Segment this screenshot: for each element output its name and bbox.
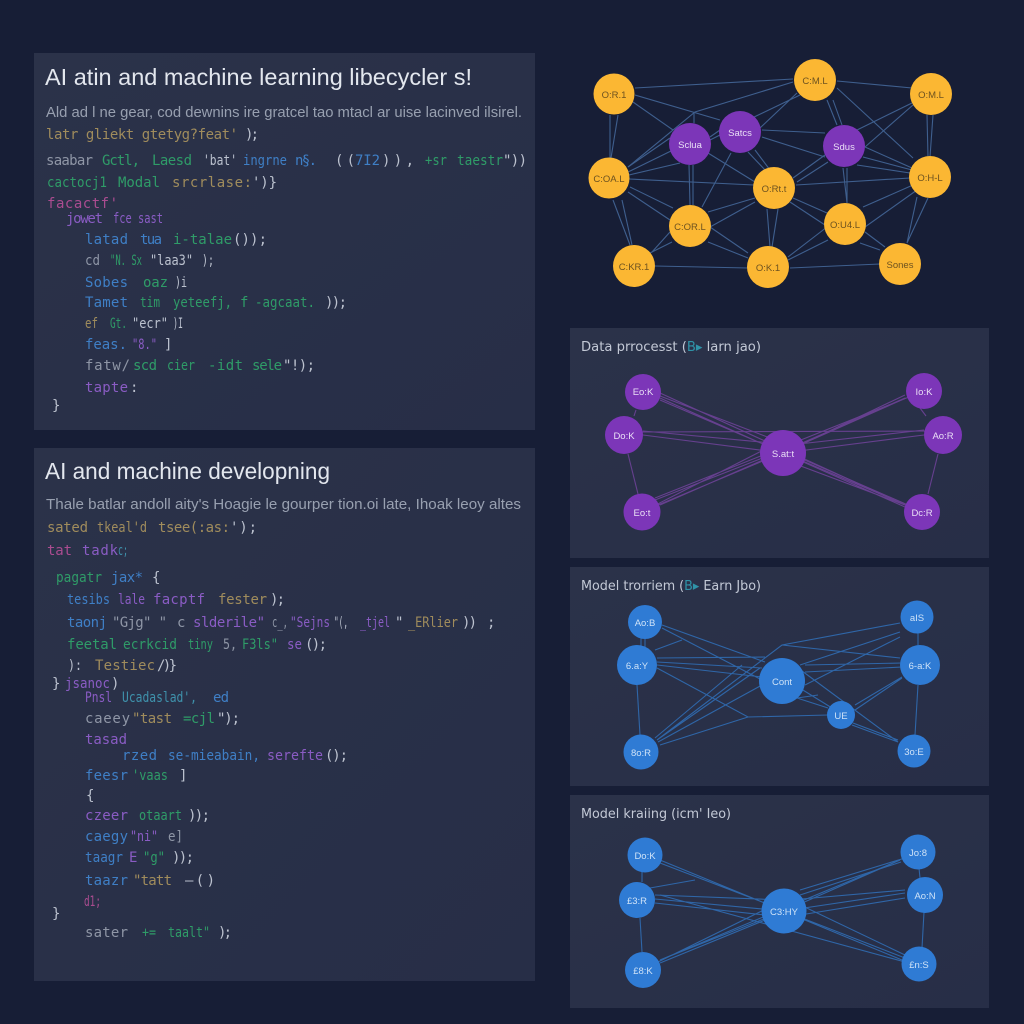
- code block: {: [86, 788, 94, 804]
- purple nodes: Satcs: [728, 128, 752, 139]
- code block: 5,: [223, 637, 237, 653]
- code block: f: [240, 295, 248, 311]
- code block: ):: [68, 658, 82, 674]
- code block: );: [218, 925, 232, 941]
- code block: Ucadaslad',: [122, 690, 197, 706]
- code block: taalt": [168, 925, 210, 941]
- panel: model tracking: [570, 795, 989, 1008]
- code block: );: [202, 253, 214, 269]
- code block: pagatr: [56, 570, 102, 586]
- blue nodes: £8:K: [633, 966, 653, 977]
- code block: c;: [118, 543, 128, 559]
- purple network edges: [628, 391, 943, 512]
- code block: ")): [503, 153, 527, 169]
- code block: ((: [335, 153, 355, 169]
- code block: "8.": [132, 337, 157, 353]
- code block: tasad: [85, 732, 127, 748]
- code block: =cjl: [183, 711, 215, 727]
- yellow nodes: O:H-L: [917, 173, 943, 184]
- code block: jowet: [66, 211, 103, 227]
- code block: tadk: [82, 543, 119, 559]
- yellow nodes: O:Rt.t: [762, 184, 787, 195]
- code block: d1;: [84, 894, 101, 910]
- panel: AI lifecycle code: [34, 53, 535, 430]
- code block: cactocj1: [47, 175, 107, 191]
- code block: fatw/: [85, 358, 130, 374]
- code block: "g": [143, 850, 165, 866]
- yellow nodes: C:OA.L: [593, 174, 625, 185]
- network graph: overview: [588, 59, 952, 288]
- panel: model training: [570, 567, 989, 786]
- purple nodes: S.at:t: [772, 449, 794, 460]
- blue nodes: Ao:N: [914, 891, 936, 902]
- code block: )),: [382, 153, 414, 169]
- code block: facptf: [153, 592, 205, 608]
- yellow nodes: C:OR.L: [674, 222, 706, 233]
- code block: :: [130, 380, 138, 396]
- code block: cd: [85, 253, 100, 269]
- blue nodes: 3o:E: [904, 747, 924, 758]
- code block: ]: [164, 337, 172, 353]
- code block: Sobes: [85, 275, 128, 291]
- code block: se: [287, 637, 302, 653]
- code block: }: [52, 398, 60, 414]
- code block: E: [129, 850, 137, 866]
- code block: "ecr": [132, 316, 168, 332]
- code block: serefte: [267, 748, 323, 764]
- yellow nodes: O:U4.L: [830, 220, 860, 231]
- blue network edges: [637, 623, 918, 745]
- code block: tua: [140, 232, 162, 248]
- code block: tat: [47, 543, 72, 559]
- code block: )i: [175, 275, 187, 291]
- graph edges: [610, 79, 933, 268]
- code block: ');: [230, 520, 257, 536]
- yellow nodes: O:K.1: [756, 263, 780, 274]
- blue nodes: UE: [834, 711, 848, 722]
- code block: "tast: [132, 711, 172, 727]
- heading: lifecycle: AI atin and machine learning libecycler s!: [45, 64, 472, 90]
- purple nodes: Sdus: [833, 142, 855, 153]
- purple nodes: Eo:t: [634, 508, 651, 519]
- code block: "tatt: [133, 873, 172, 889]
- code block: taonj: [67, 615, 107, 631]
- code block: jsanoc: [65, 676, 110, 692]
- code block: 'vaas: [132, 768, 168, 784]
- code block: slderile": [193, 615, 265, 631]
- code block: ;: [487, 615, 495, 631]
- code block: {: [152, 570, 160, 586]
- code block: n§.: [295, 153, 317, 169]
- code block: "N. Sx: [110, 253, 142, 269]
- code block: F3ls": [242, 637, 278, 653]
- code block: lale: [118, 592, 145, 608]
- yellow nodes: O:M.L: [918, 90, 944, 101]
- code block: );: [270, 592, 285, 608]
- code block: c_,: [272, 615, 288, 631]
- code block: ): [111, 676, 119, 692]
- code block: +=: [142, 925, 156, 941]
- blue nodes: [617, 600, 940, 770]
- yellow nodes: C:M.L: [802, 76, 828, 87]
- code block: ();: [325, 748, 348, 764]
- blue nodes: Ao:B: [635, 618, 655, 629]
- blue nodes: £n:S: [909, 960, 929, 971]
- code block: ");: [217, 711, 240, 727]
- blue nodes: C3:HY: [770, 907, 799, 918]
- code block: sele: [252, 358, 282, 374]
- code block: scd: [133, 358, 157, 374]
- code block: "laa3": [150, 253, 193, 269]
- code block: czeer: [85, 808, 128, 824]
- code block: }: [52, 906, 60, 922]
- panel heading: Model trorriem (B▸ Earn Jbo): [581, 579, 761, 594]
- yellow nodes: Sones: [887, 260, 914, 271]
- code block: i-talae: [173, 232, 232, 248]
- code block: tkeal'd: [97, 520, 147, 536]
- description text: Thale batlar andoll aity's Hoagie le gourper tion.oi late, Ihoak leoy altes: [46, 497, 521, 513]
- code block: ();: [305, 637, 327, 653]
- code block: /)}: [157, 658, 177, 674]
- code block: }: [52, 676, 60, 692]
- blue nodes: Jo:8: [909, 848, 927, 859]
- code block: saabar: [46, 153, 93, 169]
- blue nodes: £3:R: [627, 896, 647, 907]
- code block: );: [245, 127, 259, 143]
- yellow nodes: [588, 59, 952, 288]
- code block: ')}: [252, 175, 277, 191]
- panel heading: Data prrocesst (B▸ larn jao): [581, 340, 761, 355]
- blue nodes: aIS: [910, 613, 924, 624]
- code block: yeteefj,: [173, 295, 232, 311]
- code block: _tjel: [360, 615, 390, 631]
- code block: taagr: [85, 850, 123, 866]
- code block: [46, 127, 527, 414]
- code block: feas.: [85, 337, 127, 353]
- code block: -agcaat.: [255, 295, 315, 311]
- code block: ));: [188, 808, 210, 824]
- code block: srcrlase:: [172, 175, 252, 191]
- code block: Modal: [118, 175, 160, 191]
- code block: [47, 520, 495, 941]
- purple nodes: Eo:K: [633, 387, 654, 398]
- code block: ));: [325, 295, 347, 311]
- code block: ingrne: [243, 153, 287, 169]
- code block: Laesd: [152, 153, 192, 169]
- code block: caegy: [85, 829, 128, 845]
- heading: developing: AI and machine developning: [45, 458, 330, 484]
- code block: se-mieabain,: [168, 748, 260, 764]
- purple nodes: [669, 111, 865, 167]
- code block: ecrkcid: [123, 637, 177, 653]
- code block: )): [462, 615, 477, 631]
- code block: taazr: [85, 873, 128, 889]
- code block: _ERlier: [408, 615, 458, 631]
- panel heading: Model kraiing (icm' Ieo): [581, 807, 731, 822]
- code block: "Gjg" ": [112, 615, 167, 631]
- purple nodes: Io:K: [916, 387, 933, 398]
- blue network edges: [640, 858, 924, 963]
- code block: ());: [233, 232, 267, 248]
- code block: 'bat': [203, 153, 237, 169]
- purple nodes: Do:K: [613, 431, 635, 442]
- code block: —(): [185, 873, 215, 889]
- code block: "(,: [334, 615, 348, 631]
- code block: )I: [173, 316, 183, 332]
- code block: tsee(:as:: [158, 520, 230, 536]
- code block: "!);: [283, 358, 315, 374]
- code block: facactf': [47, 196, 118, 212]
- code block: Pnsl: [85, 690, 112, 706]
- blue nodes: 6-a:K: [909, 661, 932, 672]
- code block: latr gliekt gtetyg?feat': [46, 127, 238, 143]
- purple nodes: Sclua: [678, 140, 703, 151]
- code block: caeey: [85, 711, 130, 727]
- panel: data processing: [570, 328, 989, 558]
- code block: fce sast: [113, 211, 163, 227]
- code block: cier: [167, 358, 195, 374]
- code block: oaz: [143, 275, 168, 291]
- blue nodes: 6.a:Y: [626, 661, 649, 672]
- blue nodes: Do:K: [634, 851, 656, 862]
- code block: Gctl,: [102, 153, 140, 169]
- code block: feesr: [85, 768, 128, 784]
- code block: latad: [85, 232, 128, 248]
- code block: +sr: [425, 153, 447, 169]
- purple nodes: Dc:R: [911, 508, 933, 519]
- code block: tim: [140, 295, 160, 311]
- code block: sated: [47, 520, 88, 536]
- code block: Gt.: [110, 316, 127, 332]
- code block: ]: [179, 768, 187, 784]
- code block: ef: [85, 316, 98, 332]
- code block: "Sejns: [290, 615, 330, 631]
- code block: otaart: [139, 808, 182, 824]
- code block: Testiec: [95, 658, 155, 674]
- code block: rzed: [122, 748, 157, 764]
- purple nodes: Ao:R: [932, 431, 954, 442]
- code block: -idt: [208, 358, 243, 374]
- yellow nodes: C:KR.1: [619, 262, 649, 273]
- purple nodes: [605, 373, 962, 530]
- panel: AI development code: [34, 448, 535, 981]
- code block: jax*: [111, 570, 143, 586]
- code block: ": [395, 615, 403, 631]
- code block: tapte: [85, 380, 128, 396]
- code block: tesibs: [67, 592, 110, 608]
- code block: Tamet: [85, 295, 128, 311]
- blue nodes: Cont: [772, 677, 792, 688]
- yellow nodes: O:R.1: [602, 90, 626, 101]
- code block: e]: [168, 829, 183, 845]
- code block: fester: [218, 592, 267, 608]
- code block: ed: [213, 690, 229, 706]
- code block: "ni": [130, 829, 158, 845]
- description text: Ald ad l ne gear, cod dewnins ire gratcel tao mtacl ar uise lacinved ilsirel.: [46, 105, 522, 121]
- code block: ));: [172, 850, 194, 866]
- code block: tiny: [188, 637, 213, 653]
- code block: feetal: [67, 637, 117, 653]
- code block: 7I2: [355, 153, 380, 169]
- blue nodes: 8o:R: [631, 748, 651, 759]
- blue nodes: [619, 834, 943, 988]
- code block: sater: [85, 925, 128, 941]
- code block: c: [177, 615, 185, 631]
- code block: taestr: [457, 153, 503, 169]
